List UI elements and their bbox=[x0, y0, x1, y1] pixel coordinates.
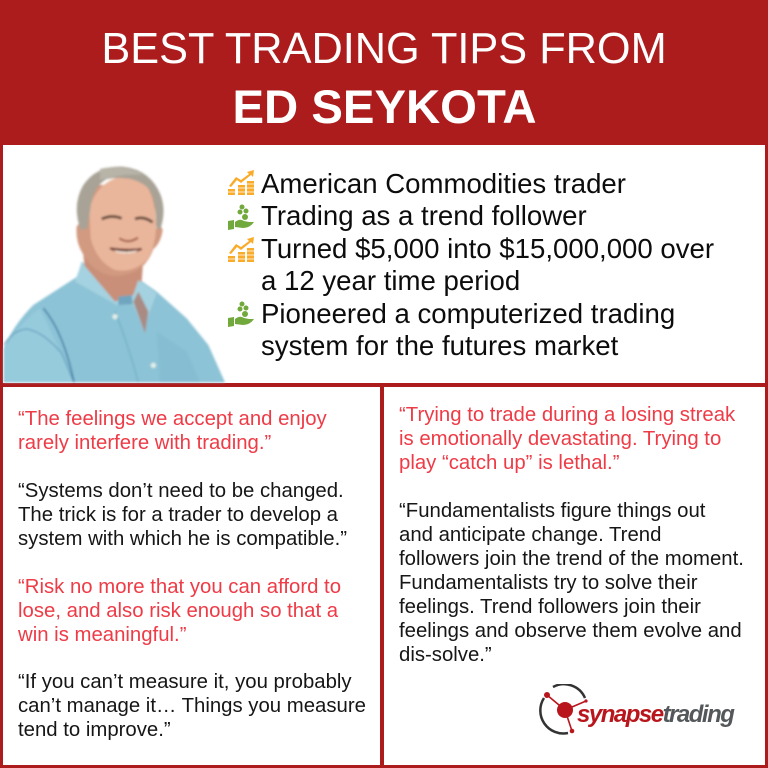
portrait photo bbox=[2, 165, 226, 384]
quote: measure: “If you can’t measure it, you probably bbox=[18, 671, 352, 693]
quote: fundamentalists: dis-solve.” bbox=[399, 644, 492, 666]
quote: feelings: “The feelings we accept and enjoy bbox=[18, 408, 327, 430]
quote: fundamentalists: feelings. Trend followers join their bbox=[399, 596, 701, 618]
quote: losing streak bbox=[399, 404, 736, 474]
quote: fundamentalists: Fundamentalists try to solve their bbox=[399, 572, 698, 594]
quote: feelings: rarely interfere with trading.” bbox=[18, 432, 271, 454]
quote: risk bbox=[18, 576, 341, 646]
quote: systems: The trick is for a trader to develop a bbox=[18, 504, 338, 526]
icon: coins chart 1 bbox=[228, 170, 254, 195]
bullet: pioneered bbox=[261, 298, 675, 361]
bullet: turned $5,000: a 12 year time period bbox=[261, 265, 520, 296]
quote: measure: can’t manage it… Things you measure bbox=[18, 695, 366, 717]
bullet: pioneered: Pioneered a computerized trading bbox=[261, 298, 675, 329]
quote: risk: lose, and also risk enough so that a bbox=[18, 600, 338, 622]
quote: losing streak: play “catch up” is lethal.” bbox=[399, 452, 619, 474]
logo: synapse trading bbox=[539, 684, 734, 735]
quote: risk: win is meaningful.” bbox=[18, 624, 186, 646]
quote: fundamentalists: feelings and observe them evolve and bbox=[399, 620, 742, 642]
logo wordmark: synapsetrading bbox=[577, 701, 733, 728]
title line 1: BEST TRADING TIPS FROM bbox=[101, 25, 667, 73]
icon: coins chart 2 bbox=[228, 237, 254, 262]
quote: feelings bbox=[18, 408, 327, 454]
bullet: pioneered: system for the futures market bbox=[261, 330, 618, 361]
bullet: turned $5,000: Turned $5,000 into $15,000,000 over bbox=[261, 233, 714, 264]
bullet: American Commodities trader: American Commodities trader bbox=[261, 168, 626, 199]
quote: fundamentalists bbox=[399, 500, 744, 666]
icon: money hand 1 bbox=[228, 204, 254, 230]
quote: losing streak: is emotionally devastating. Trying to bbox=[399, 428, 721, 450]
quote: fundamentalists: followers join the trend of the moment. bbox=[399, 548, 744, 570]
quote: risk: “Risk no more that you can afford to bbox=[18, 576, 341, 598]
icon: money hand 2 bbox=[228, 302, 254, 327]
quote: systems: “Systems don’t need to be changed. bbox=[18, 480, 344, 502]
quote: measure: tend to improve.” bbox=[18, 719, 171, 741]
quote: losing streak: “Trying to trade during a losing streak bbox=[399, 404, 735, 426]
title line 2: ED SEYKOTA bbox=[233, 81, 536, 134]
quote: systems: system with which he is compatible.” bbox=[18, 528, 347, 550]
bullet: turned $5,000 bbox=[261, 233, 714, 296]
quote: fundamentalists: and anticipate change. Trend bbox=[399, 524, 661, 546]
quote: measure bbox=[18, 671, 366, 741]
bullet: trend follower: Trading as a trend follower bbox=[261, 200, 587, 231]
quote: systems bbox=[18, 480, 347, 550]
logo mark bbox=[539, 684, 588, 735]
quote: fundamentalists: “Fundamentalists figure things out bbox=[399, 500, 705, 522]
header banner bbox=[0, 0, 768, 145]
